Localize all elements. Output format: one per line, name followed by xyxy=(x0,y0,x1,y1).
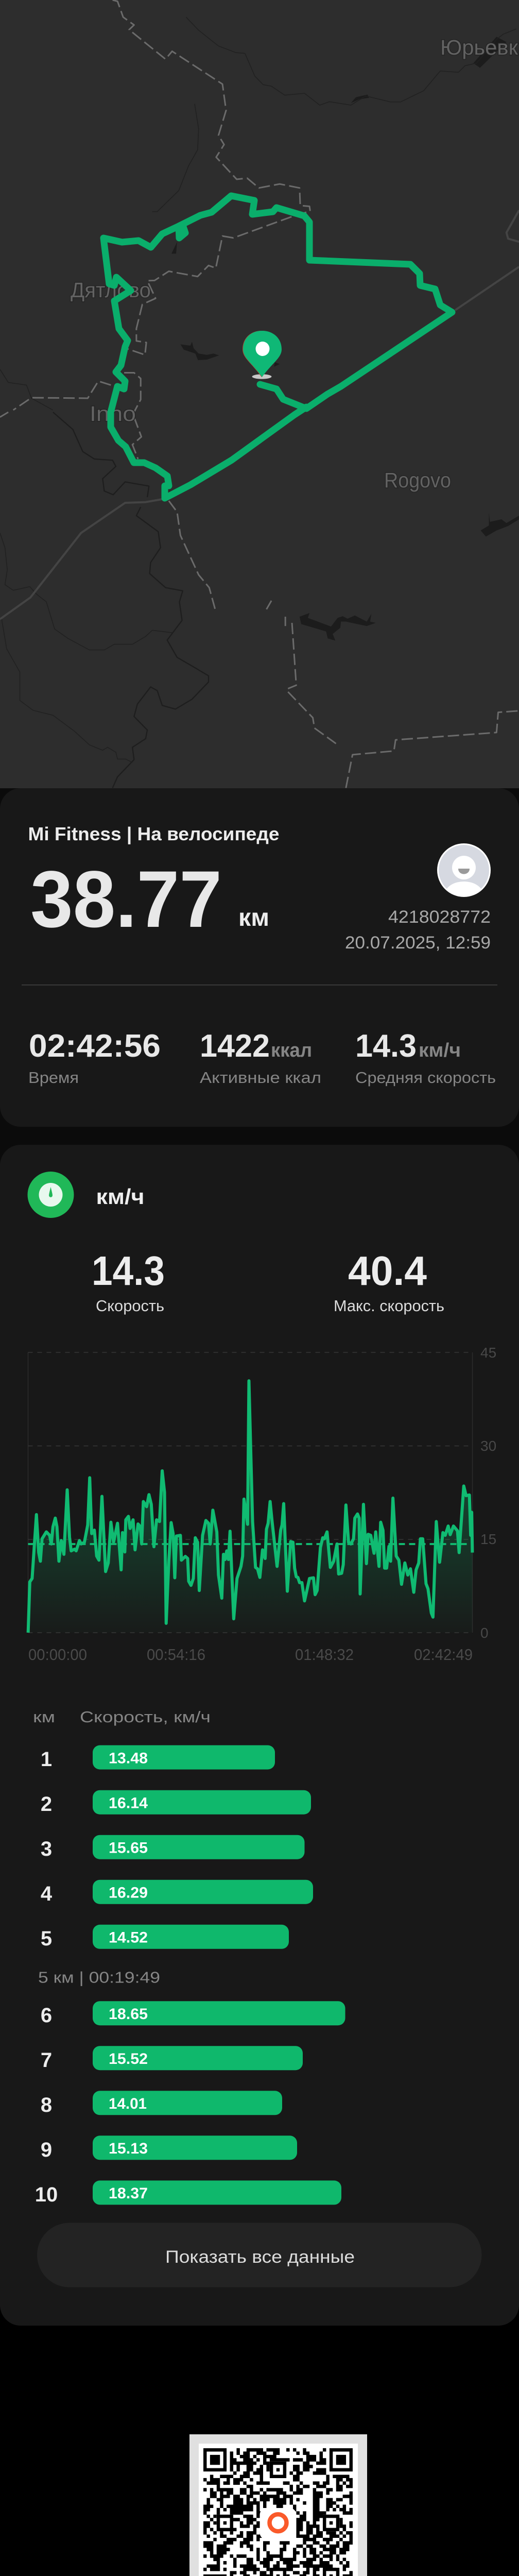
bar row: km 1 xyxy=(41,1745,275,1771)
button: show all data: Показать все данные xyxy=(165,2247,355,2267)
table header: Скорость, км/ч xyxy=(80,1708,211,1726)
table header: км xyxy=(33,1708,55,1726)
stat: active calories: ккал xyxy=(271,1040,312,1061)
bar row: km 6: 6 xyxy=(41,2004,52,2027)
chart y axis labels: 15 xyxy=(480,1531,496,1547)
bar row: km 10 xyxy=(35,2180,341,2206)
distance value: 38.77 xyxy=(30,855,222,944)
map label: Дятлово: Дятлово xyxy=(71,278,151,302)
bar row: km 7: 7 xyxy=(41,2049,52,2072)
button: show all data xyxy=(37,2223,482,2287)
stat: time: 02:42:56 xyxy=(29,1028,161,1064)
map: southern borders and lakes xyxy=(0,412,519,788)
chart area fill xyxy=(28,1381,472,1633)
table header xyxy=(33,1708,211,1726)
chart y axis labels: 0 xyxy=(480,1625,489,1641)
summary heading: Mi Fitness | На велосипеде xyxy=(28,823,279,845)
bar row: km 4: 16.29 xyxy=(109,1885,148,1901)
bar row: km 10: 18.37 xyxy=(109,2185,148,2202)
stat: max speed xyxy=(334,1248,444,1315)
stat: speed: Скорость xyxy=(96,1297,164,1315)
map label: Rogovo: Rogovo xyxy=(384,468,451,492)
line chart: speed over time xyxy=(28,1345,496,1664)
speed panel heading: км/ч xyxy=(96,1184,144,1209)
distance unit: км xyxy=(238,904,269,931)
bar row: km 4 xyxy=(41,1880,313,1905)
bar row: km 6 xyxy=(41,2001,345,2027)
bar row: km 2: 16.14 xyxy=(109,1795,148,1811)
panel: speed xyxy=(0,1145,519,2326)
QR code xyxy=(189,2434,367,2576)
bar row: km 9 xyxy=(41,2136,297,2161)
stat: average speed: км/ч xyxy=(419,1040,461,1061)
workout date: 20.07.2025, 12:59 xyxy=(345,933,491,953)
stat: active calories xyxy=(200,1028,321,1087)
user id: 4218028772 xyxy=(388,907,491,927)
stat: time xyxy=(28,1028,161,1087)
chart y axis labels: 45 xyxy=(480,1345,496,1361)
bar row: km 9: 15.13 xyxy=(109,2140,148,2157)
chart y axis labels: 30 xyxy=(480,1438,496,1454)
start pin icon xyxy=(243,331,282,379)
stat: average speed: Средняя скорость xyxy=(355,1069,496,1087)
bar row: km 5: 5 xyxy=(41,1927,52,1950)
bar row: km 2 xyxy=(41,1790,311,1816)
bar row: km 6: 18.65 xyxy=(109,2006,148,2023)
bar row: km 1: 13.48 xyxy=(109,1750,148,1767)
bar row: km 3: 3 xyxy=(41,1838,52,1860)
stat: speed: 14.3 xyxy=(92,1248,165,1294)
bar row: km 5: 14.52 xyxy=(109,1929,148,1946)
chart x axis labels: 02:42:49 xyxy=(414,1646,473,1664)
map label: Inno: Inno xyxy=(90,402,136,426)
split label: 5 км | 00:19:49 xyxy=(38,1968,160,1987)
bar row: km 8: 8 xyxy=(41,2094,52,2116)
stat: active calories: Активные ккал xyxy=(200,1069,321,1087)
bar row: km 8: 14.01 xyxy=(109,2095,147,2112)
route line xyxy=(103,196,452,498)
bar row: km 7 xyxy=(41,2046,303,2072)
chart x axis labels: 00:54:16 xyxy=(147,1646,205,1664)
bar row: km 9: 9 xyxy=(41,2139,52,2161)
bar row: km 2: 2 xyxy=(41,1793,52,1816)
bar row: km 7: 15.52 xyxy=(109,2050,148,2067)
panel: workout summary xyxy=(0,788,519,1127)
stat: speed xyxy=(92,1248,165,1315)
bar row: km 1: 1 xyxy=(41,1748,52,1771)
chart x axis labels: 01:48:32 xyxy=(295,1646,354,1664)
stat: time: Время xyxy=(28,1069,79,1087)
bar row: km 10: 10 xyxy=(35,2183,58,2206)
stat: average speed xyxy=(355,1028,496,1087)
stat: max speed: Макс. скорость xyxy=(334,1297,444,1315)
bar row: km 3 xyxy=(41,1835,305,1860)
stat: average speed: 14.3 xyxy=(355,1028,417,1064)
chart x axis labels xyxy=(28,1646,473,1664)
stat: active calories: 1422 xyxy=(200,1028,270,1064)
stat: max speed: 40.4 xyxy=(348,1248,427,1294)
icon: speedometer xyxy=(28,1172,74,1218)
map background xyxy=(0,0,519,788)
icon: user avatar xyxy=(437,843,491,897)
map: northern borders and lakes xyxy=(0,0,519,412)
chart y axis labels xyxy=(480,1345,496,1641)
bar row: km 8 xyxy=(41,2091,282,2116)
bar row: km 3: 15.65 xyxy=(109,1839,148,1857)
average speed dashed line xyxy=(28,1543,473,1545)
chart x axis labels: 00:00:00 xyxy=(28,1646,87,1664)
bar row: km 5 xyxy=(41,1925,289,1950)
bar row: km 4: 4 xyxy=(41,1883,53,1905)
chart speed line xyxy=(28,1381,472,1633)
